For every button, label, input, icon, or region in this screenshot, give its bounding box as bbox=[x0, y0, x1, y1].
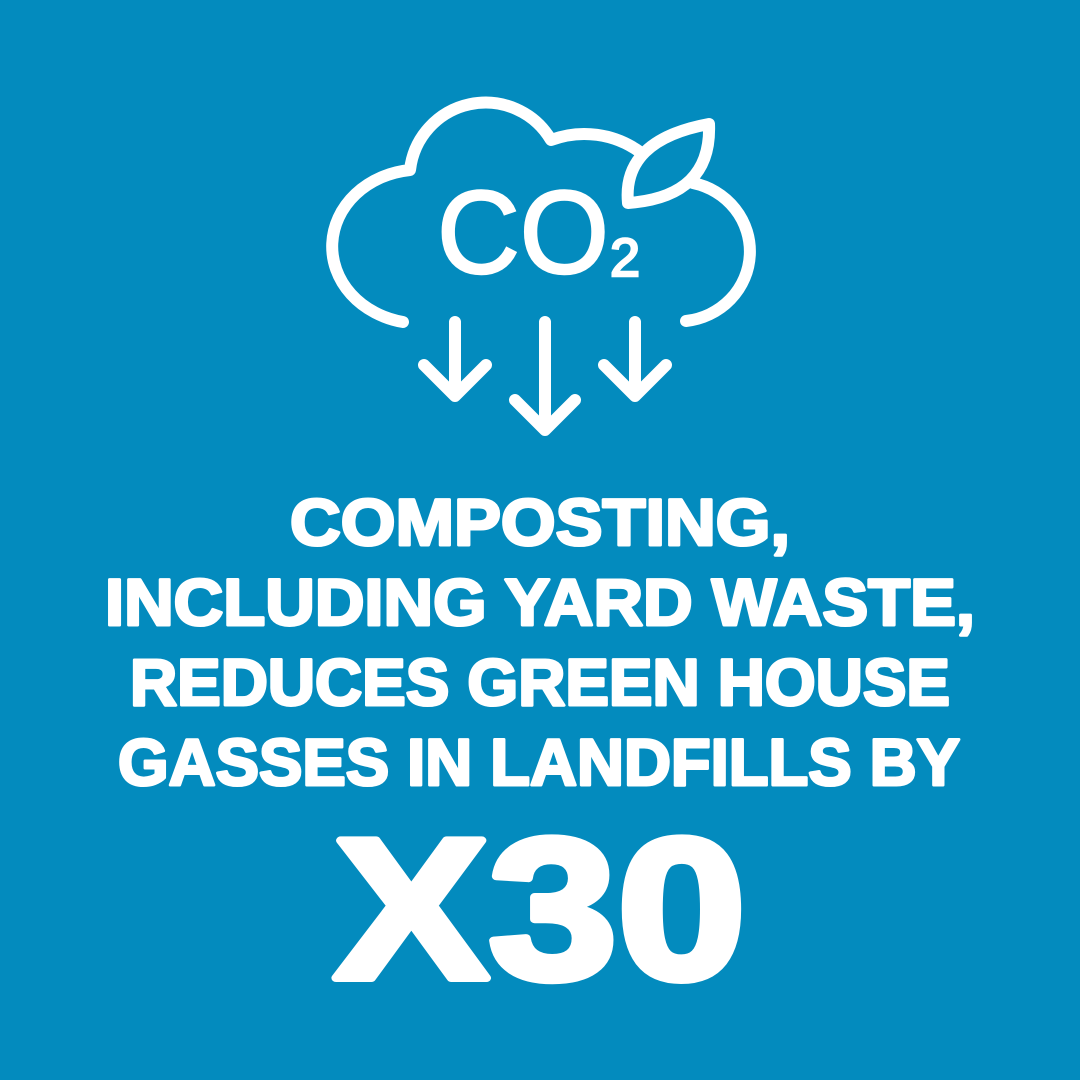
arrow right bbox=[604, 322, 666, 396]
headline text bbox=[105, 485, 975, 799]
icon: leaf bbox=[628, 124, 709, 203]
CO2 label: CO bbox=[437, 167, 609, 299]
big number X30: X30 bbox=[334, 798, 746, 1021]
arrow middle bbox=[515, 322, 575, 430]
cloud outline bbox=[332, 103, 750, 322]
arrow left bbox=[424, 322, 486, 396]
headline text: COMPOSTING, bbox=[290, 485, 790, 559]
headline text: REDUCES GREEN HOUSE bbox=[130, 645, 950, 719]
headline text: INCLUDING YARD WASTE, bbox=[105, 565, 975, 639]
CO2 label: 2 bbox=[610, 228, 640, 288]
headline text: GASSES IN LANDFILLS BY bbox=[118, 725, 960, 799]
icon: CO2 cloud with leaf and arrows bbox=[332, 103, 750, 430]
